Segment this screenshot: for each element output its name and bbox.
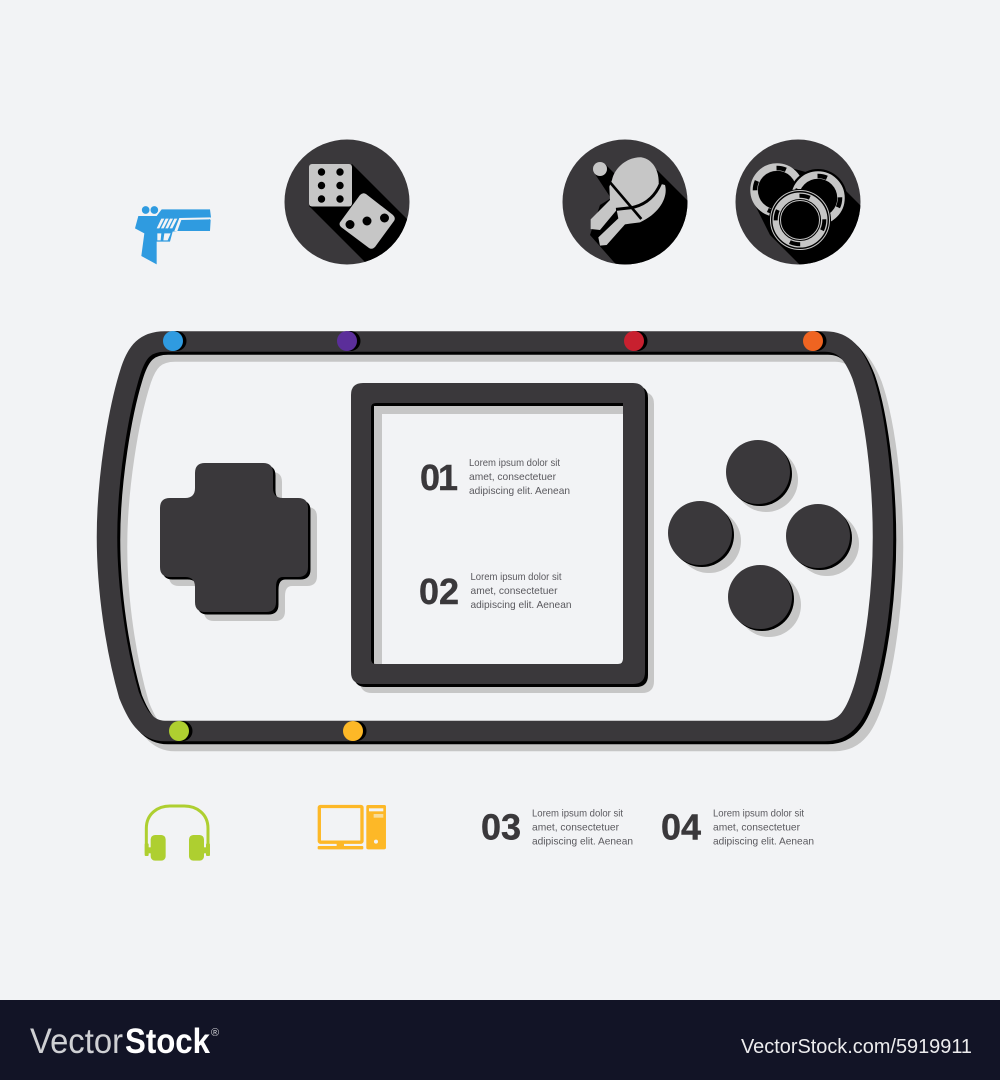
footer logo — [30, 1022, 219, 1061]
text block 04: Lorem ipsum dolor sit — [713, 808, 804, 820]
icon: yellow desktop computer — [318, 805, 386, 849]
text block 03: amet, consectetuer — [532, 822, 619, 834]
chip front — [769, 189, 831, 251]
text block 01: 01 — [420, 457, 458, 498]
action buttons — [668, 440, 859, 637]
text block 03: Lorem ipsum dolor sit — [532, 808, 623, 820]
game console — [107, 331, 893, 741]
icon: table tennis badge — [562, 140, 688, 264]
text block 01 — [420, 457, 570, 498]
text block 03: 03 — [481, 806, 521, 848]
footer bar — [0, 1000, 1000, 1080]
text block 01: amet, consectetuer — [469, 471, 556, 483]
text block 04: 04 — [661, 806, 701, 848]
text block 02: adipiscing elit. Aenean — [470, 599, 572, 611]
icon: poker chips badge — [736, 140, 860, 264]
d-pad — [160, 463, 317, 621]
footer image id: VectorStock.com/5919911 — [741, 1035, 972, 1058]
text block 04 — [661, 806, 814, 848]
text block 02: Lorem ipsum dolor sit — [470, 571, 562, 583]
text block 04: amet, consectetuer — [713, 822, 800, 834]
chip right — [789, 169, 847, 227]
footer logo: Stock — [125, 1022, 210, 1061]
icon: dice badge — [284, 140, 410, 264]
icon: blue pistol — [135, 206, 211, 264]
text block 04: adipiscing elit. Aenean — [713, 836, 814, 848]
console body outline — [107, 342, 893, 741]
text block 01: adipiscing elit. Aenean — [469, 485, 570, 497]
text block 02: amet, consectetuer — [470, 585, 558, 597]
text block 03: adipiscing elit. Aenean — [532, 836, 633, 848]
footer logo: ® — [211, 1027, 219, 1039]
console screen frame — [351, 383, 654, 693]
text block 01: Lorem ipsum dolor sit — [469, 457, 560, 469]
chip left — [754, 167, 800, 213]
text block 02 — [419, 571, 572, 612]
icon: green headphones — [145, 806, 210, 861]
footer logo: Vector — [30, 1022, 123, 1061]
text block 03 — [481, 806, 633, 848]
text block 02: 02 — [419, 571, 459, 612]
coloured marker dots — [163, 331, 826, 741]
